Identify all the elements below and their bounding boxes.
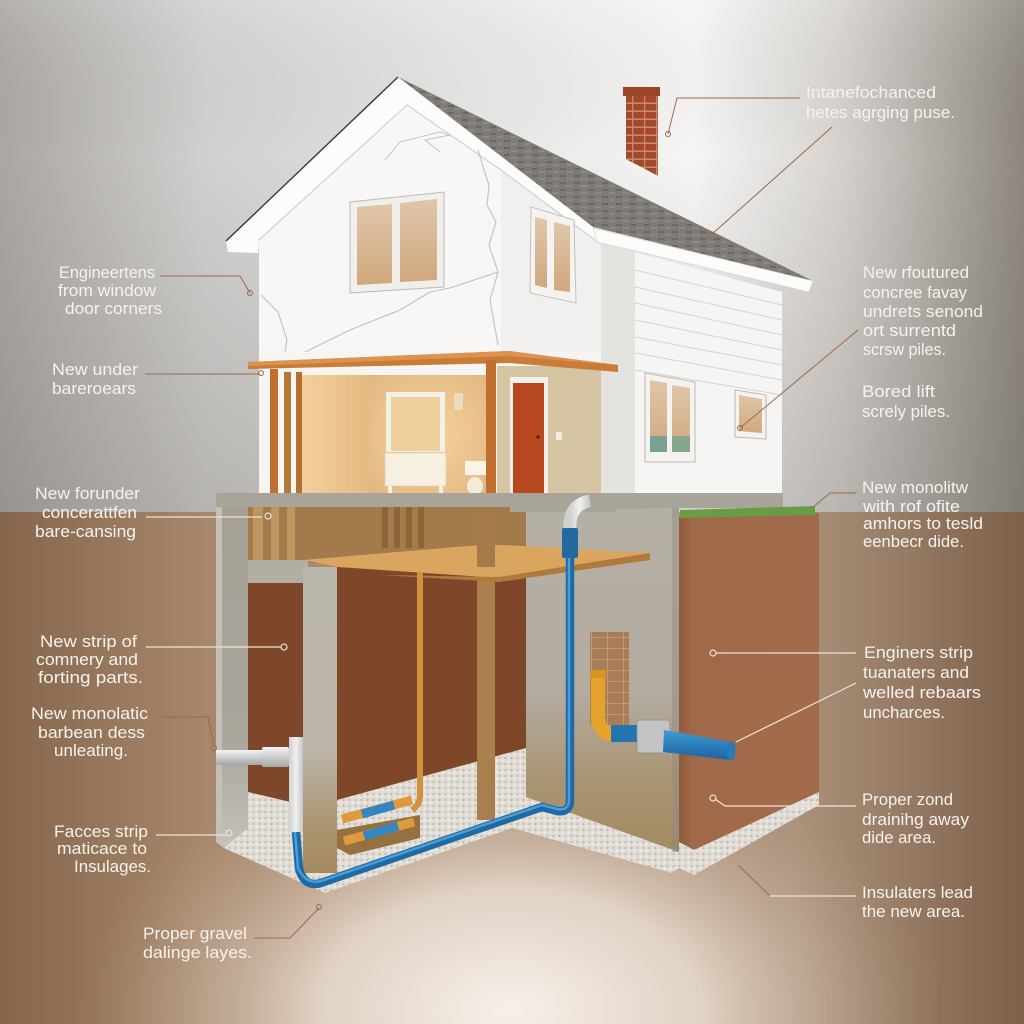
- porch beam: [248, 351, 618, 372]
- label: new reinforced: [863, 264, 983, 359]
- ground floor room: [248, 351, 618, 495]
- label: bored lift: screly piles.: [862, 403, 950, 421]
- label: engineers strip: Enginers strip: [864, 644, 973, 662]
- sconce: [454, 393, 463, 410]
- label: insulaters: Insulaters lead: [862, 884, 973, 902]
- label: bored lift: Bored lift: [862, 383, 935, 401]
- right soil block: [679, 506, 819, 875]
- house upper storey: [226, 77, 813, 494]
- label: proper gravel: dalinge layes.: [143, 944, 252, 962]
- label: monolithic: with rof ofite: [862, 498, 960, 516]
- label: new under: New under: [52, 361, 139, 379]
- label: monolithic: eenbecr dide.: [863, 533, 964, 551]
- label: chimney note: Intanefochanced: [806, 84, 936, 102]
- label: faces strip: [54, 823, 151, 876]
- icon: chimney: [623, 87, 660, 183]
- heater coil: [337, 800, 420, 855]
- lower wood post: [477, 572, 495, 820]
- label: chimney note: [806, 84, 955, 122]
- label: new reinforced: New rfoutured: [863, 264, 969, 282]
- brown earth back walls: [248, 560, 526, 805]
- light switch: [556, 432, 562, 440]
- label: new reinforced: ort surrentd: [863, 322, 956, 340]
- label: new monolatic: unleating.: [54, 742, 128, 760]
- label: engineers strip: tuanaters and: [863, 664, 969, 682]
- label: new forunder: [35, 485, 141, 541]
- grey drain pipe: [216, 737, 303, 832]
- label: engineertens: Engineertens: [59, 264, 155, 282]
- cabinet: [385, 453, 446, 494]
- label: engineers strip: welled rebaars: [862, 684, 981, 702]
- lamp: [465, 461, 486, 495]
- brick opening and pipes: [590, 632, 736, 760]
- label: new reinforced: scrsw piles.: [863, 341, 946, 359]
- right concrete wall: [526, 505, 679, 852]
- label: chimney note: hetes agrging puse.: [806, 104, 955, 122]
- label: monolithic: New monolitw: [862, 479, 968, 497]
- basement cutaway: [216, 493, 679, 893]
- label: new forunder: concerattfen: [42, 504, 137, 522]
- wood deck: [303, 545, 650, 582]
- label: new reinforced: concree favay: [863, 284, 968, 302]
- label: new strip: New strip of: [40, 633, 137, 651]
- gravel floor: [224, 748, 679, 893]
- window: right wing small: [735, 390, 766, 439]
- label: proper zond: [862, 791, 970, 847]
- label: faces strip: Insulages.: [74, 858, 151, 876]
- concrete column: [303, 567, 337, 873]
- label: faces strip: Facces strip: [54, 823, 148, 841]
- timber back wall: [248, 505, 526, 563]
- label: new monolatic: [31, 705, 148, 760]
- window: right wing large: [645, 373, 695, 462]
- posts: [270, 360, 496, 494]
- label: proper zond: dide area.: [862, 829, 936, 847]
- label: engineertens: [58, 264, 162, 318]
- label: new monolatic: barbean dess: [38, 724, 145, 742]
- window: gable: [350, 192, 444, 293]
- label: engineertens: from window: [58, 282, 156, 300]
- label: new strip: comnery and: [36, 651, 138, 669]
- label: new forunder: bare-cansing: [35, 523, 136, 541]
- label: new strip: forting parts.: [38, 669, 143, 687]
- label: insulaters: [862, 884, 973, 921]
- left concrete wall: [216, 493, 248, 848]
- blue water pipe: [295, 556, 570, 884]
- upper wood post: [477, 513, 495, 567]
- elbow pipe top: [562, 501, 590, 558]
- label: proper gravel: [143, 925, 252, 962]
- label: faces strip: maticace to: [57, 840, 147, 858]
- label: engineers strip: uncharces.: [863, 704, 945, 722]
- label: insulaters: the new area.: [862, 903, 965, 921]
- mirror: [386, 392, 445, 452]
- label: new strip: [36, 633, 143, 687]
- label: proper zond: Proper zond: [862, 791, 953, 809]
- wall cracks: [261, 132, 498, 352]
- label: new under: bareroears: [52, 380, 136, 398]
- window: upper side: [530, 207, 576, 303]
- label: monolithic: [862, 479, 983, 551]
- label: proper gravel: Proper gravel: [143, 925, 247, 943]
- label: new reinforced: undrets senond: [863, 303, 983, 321]
- door: [510, 377, 548, 495]
- label: engineertens: door corners: [65, 300, 162, 318]
- lintel: [248, 560, 308, 583]
- label: monolithic: amhors to tesld: [863, 515, 983, 533]
- label: engineers strip: [862, 644, 981, 722]
- label: new monolatic: New monolatic: [31, 705, 148, 723]
- callout lines: [145, 98, 858, 938]
- foundation slab: [216, 493, 783, 512]
- label: new forunder: New forunder: [35, 485, 141, 503]
- label: proper zond: drainihg away: [862, 811, 970, 829]
- label: new under: [52, 361, 139, 398]
- label: bored lift: [862, 383, 950, 421]
- orange vertical pipe: [412, 572, 420, 810]
